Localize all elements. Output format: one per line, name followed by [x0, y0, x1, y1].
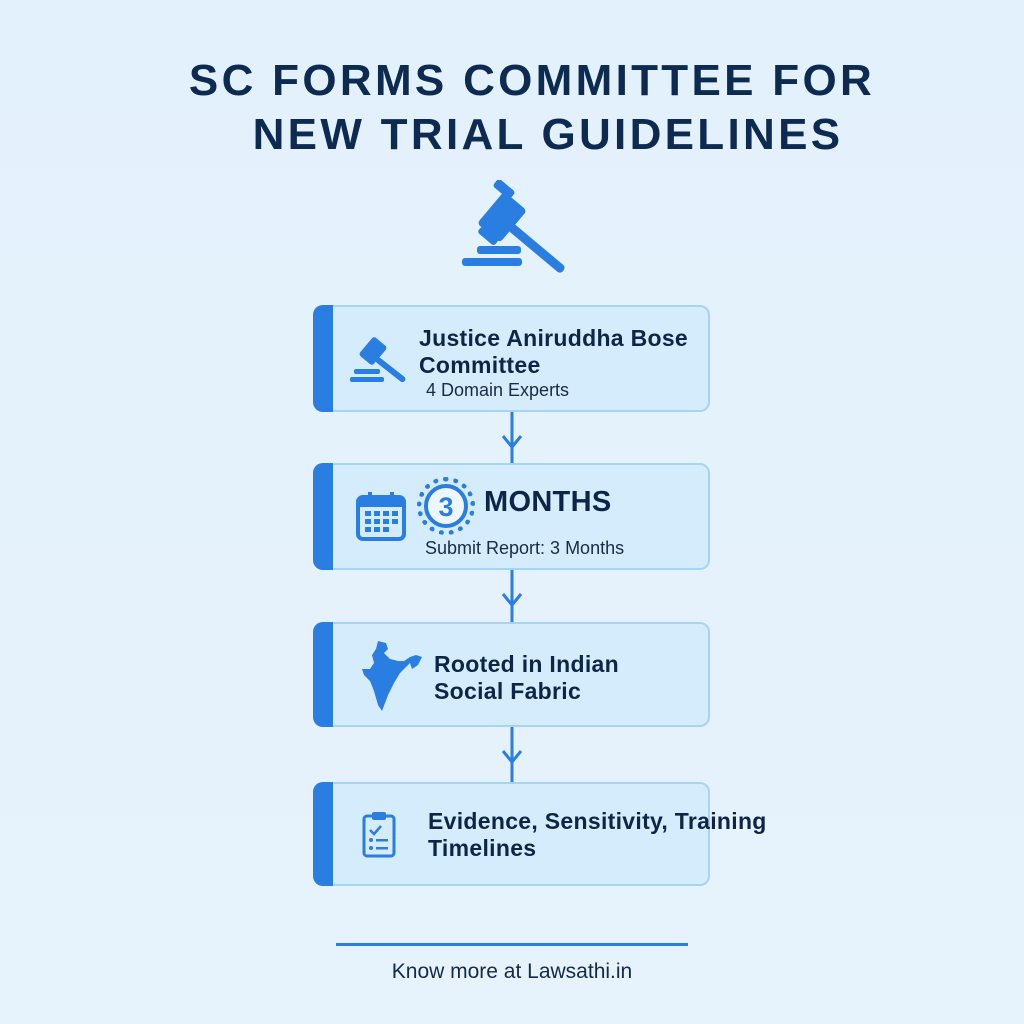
arrow — [502, 727, 522, 782]
icon: india map — [362, 641, 422, 711]
title: NEW TRIAL GUIDELINES — [253, 110, 843, 159]
text: india: Rooted in Indian — [434, 651, 619, 677]
icon: gavel — [462, 180, 564, 273]
text: committee — [419, 325, 688, 378]
icon: badge 3 — [417, 477, 475, 535]
text: india — [434, 651, 619, 704]
text: india: Social Fabric — [434, 678, 581, 704]
text: evidence: Evidence, Sensitivity, Training — [428, 808, 767, 834]
panel: months — [313, 463, 710, 570]
footer text: Know more at Lawsathi.in — [392, 960, 632, 983]
icon: small gavel — [350, 337, 406, 382]
icon: badge 3: 3 — [438, 492, 454, 522]
panel: committee: 4 Domain Experts — [426, 380, 569, 400]
text: committee: Justice Aniruddha Bose — [419, 325, 688, 351]
icon: calendar — [356, 492, 406, 541]
arrow — [502, 412, 522, 463]
title — [189, 56, 875, 159]
panel: india — [313, 622, 710, 727]
footer line — [336, 943, 688, 946]
panel: months: Submit Report: 3 Months — [425, 538, 624, 558]
text: evidence: Timelines — [428, 835, 536, 861]
panel: committee — [313, 305, 710, 412]
text: evidence — [428, 808, 767, 861]
text: months: MONTHS — [484, 486, 611, 518]
text: committee: Committee — [419, 352, 541, 378]
arrow — [502, 570, 522, 622]
icon: clipboard — [362, 812, 396, 858]
panel: evidence — [313, 782, 710, 886]
title: SC FORMS COMMITTEE FOR — [189, 56, 875, 105]
